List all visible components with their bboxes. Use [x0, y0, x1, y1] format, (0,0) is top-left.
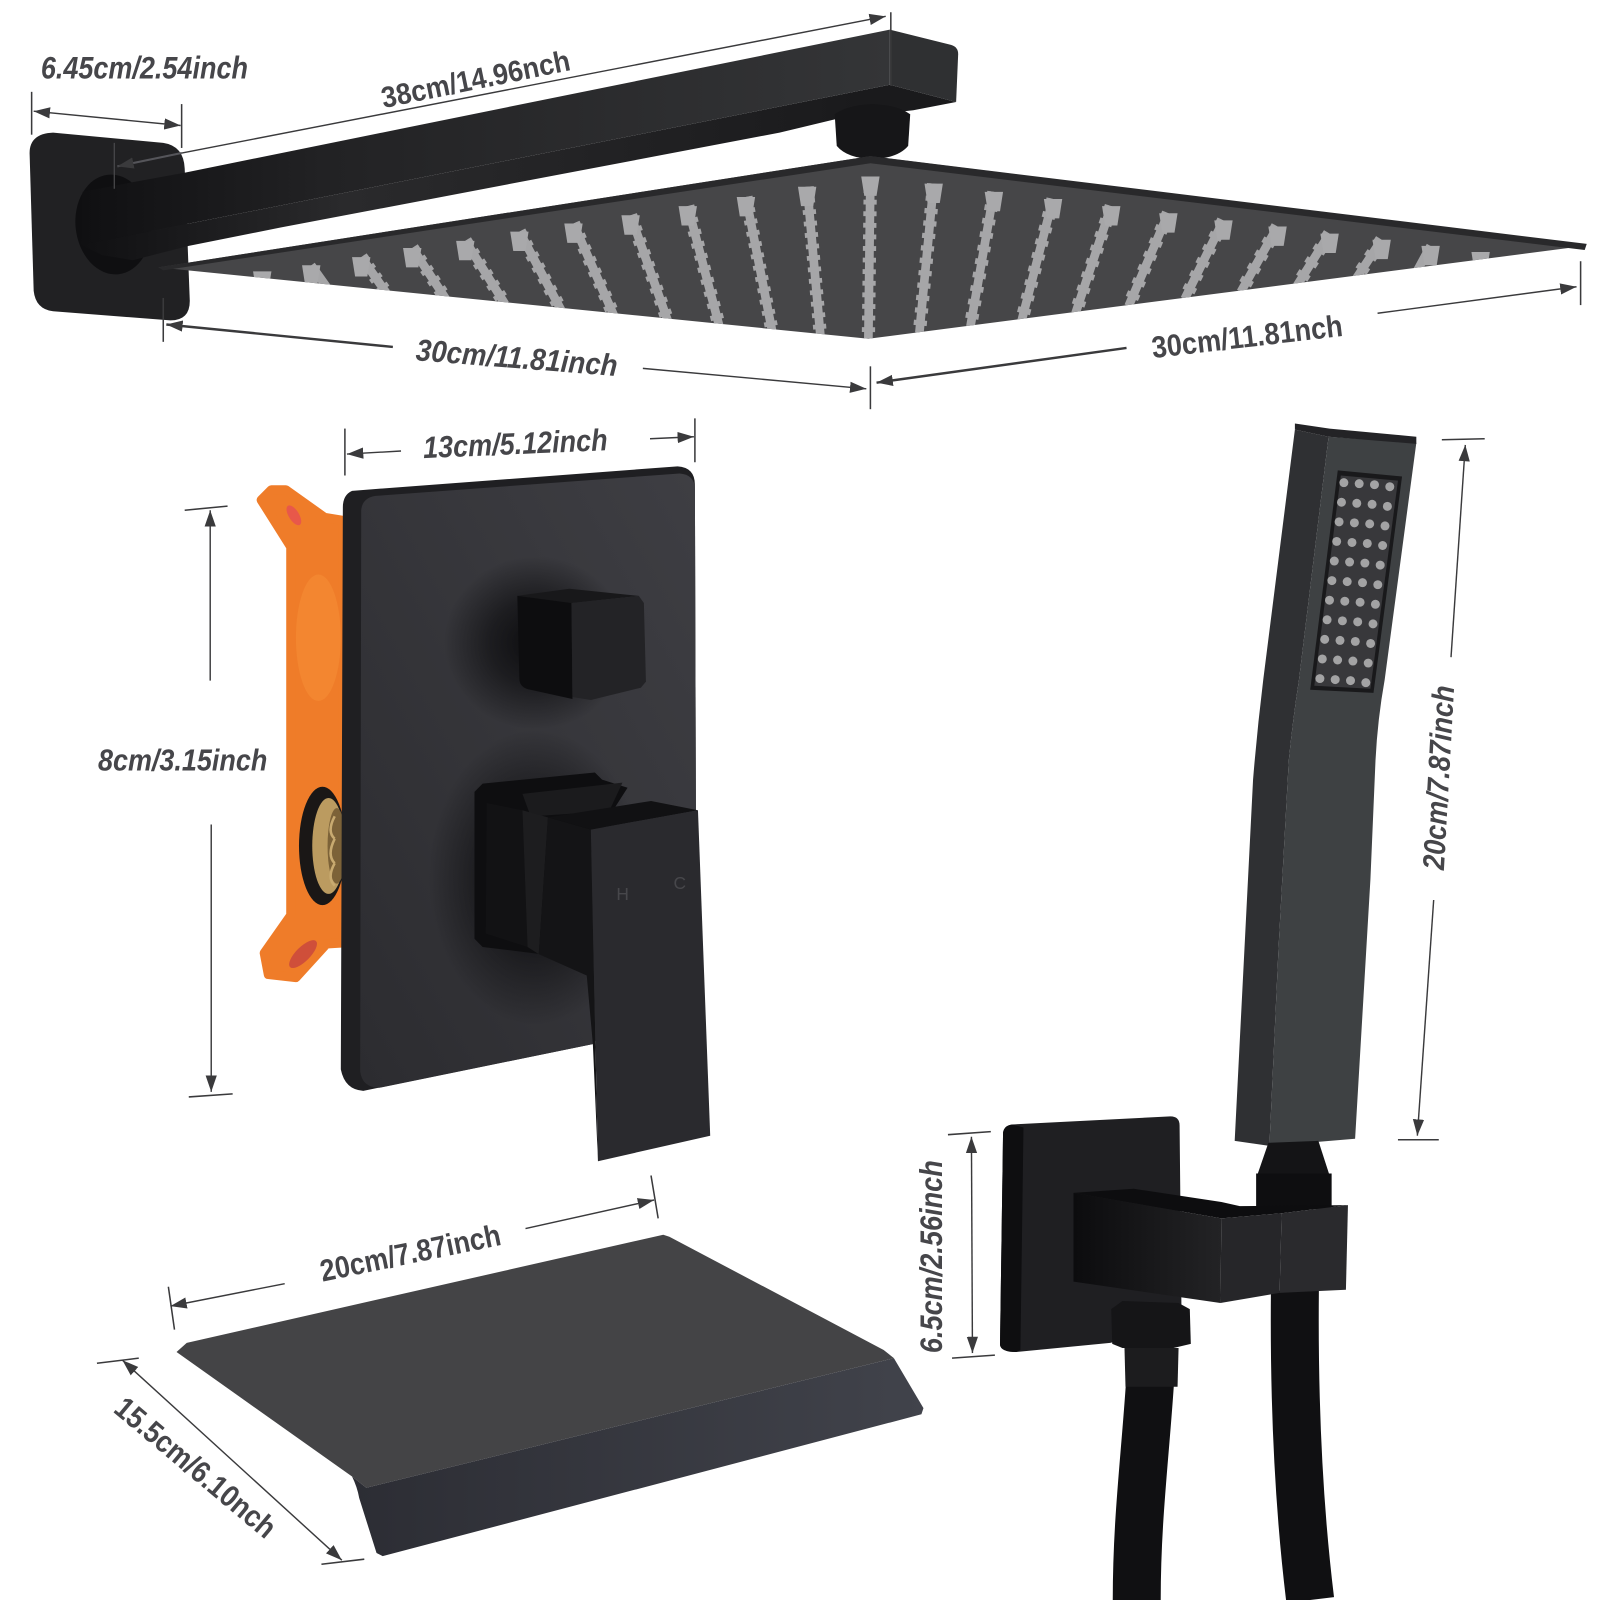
elbow end face: [1280, 1205, 1348, 1293]
elbow front face: [1220, 1213, 1282, 1303]
spray nozzles: [1315, 478, 1394, 687]
lower mounting hole: [285, 936, 321, 972]
mixer joint: [522, 810, 548, 954]
diverter knob: [517, 589, 646, 700]
dimension: hand shower length 20cm: [1398, 439, 1485, 1140]
dimension: valve plate width 13cm: 13cm/5.12inch: [422, 423, 608, 465]
dimension: arm flange 6.45cm: [32, 50, 248, 148]
spout front face: [352, 1358, 923, 1556]
product: rain shower head and wall arm: [30, 30, 1587, 339]
left hose: [1137, 1383, 1150, 1600]
upper mounting hole: [284, 503, 304, 528]
dimension: holder height 6.5cm: [913, 1132, 995, 1358]
lever front: [591, 810, 710, 1161]
plate front face: [360, 473, 696, 1088]
hot mark: H: [616, 884, 629, 904]
handset side face: [1235, 430, 1329, 1146]
product: shower hose holder and hoses: [1000, 1116, 1348, 1600]
head plate: [158, 156, 1585, 339]
product: waterfall tub spout: [177, 1235, 923, 1556]
mixer base: [474, 772, 628, 954]
elbow top: [1073, 1189, 1348, 1218]
handset front face: [1269, 437, 1416, 1146]
dimension: spout depth 15.5cm: [97, 1358, 364, 1564]
ferrule: [1124, 1348, 1179, 1387]
spout top face: [177, 1235, 894, 1488]
dimension: spout depth 15.5cm: 15.5cm/6.10nch: [108, 1391, 283, 1545]
spray face: [1310, 470, 1402, 693]
dimension: head width 30cm left: [163, 298, 870, 409]
dimension: holder height 6.5cm: 6.5cm/2.56inch: [913, 1160, 949, 1353]
product: mixer valve box and trim: [261, 466, 710, 1161]
arm end face: [890, 30, 958, 102]
plate bevel: [1000, 1124, 1023, 1352]
handset top edge: [1295, 423, 1416, 444]
orange rough-in box: [261, 490, 343, 978]
dimension: valve plate height 8cm: [98, 506, 267, 1097]
cold mark: C: [673, 873, 686, 893]
nozzle columns: [253, 177, 1490, 339]
knock-out circle: [296, 574, 341, 701]
collar: [1256, 1173, 1332, 1209]
hex nut: [1111, 1301, 1191, 1348]
dimension: spout width 20cm: [168, 1176, 658, 1330]
dimension: arm length 38cm: 38cm/14.96nch: [378, 44, 573, 115]
escutcheon: [70, 171, 156, 278]
dimension: valve plate height 8cm: 8cm/3.15inch: [98, 743, 267, 777]
valve trim plate: [341, 466, 696, 1091]
dimension: head width 30cm left: 30cm/11.81inch: [415, 333, 619, 383]
head rim: [158, 156, 1587, 270]
dimension: head width 30cm right: [877, 261, 1581, 383]
underside of arm: [82, 85, 956, 260]
elbow side: [1073, 1193, 1221, 1303]
cone neck: [1257, 1141, 1330, 1176]
dimension: spout width 20cm: 20cm/7.87inch: [317, 1218, 504, 1288]
product: hand shower: [1235, 423, 1416, 1146]
right hose: [1295, 1291, 1310, 1600]
dimension: hand shower length 20cm: 20cm/7.87inch: [1417, 684, 1461, 872]
swivel nut: [835, 104, 910, 159]
arm side face: [82, 30, 890, 245]
dimension: valve plate width 13cm: [345, 418, 695, 476]
dimension: head width 30cm right: 30cm/11.81nch: [1150, 309, 1344, 365]
inlet gasket: [299, 787, 346, 905]
brass inlet: [312, 798, 346, 894]
wall plate: [30, 133, 190, 320]
plate shadows: [447, 569, 590, 1000]
lever side: [539, 817, 598, 1161]
holder wall plate: [1000, 1116, 1182, 1352]
dimension: arm length 38cm: [114, 12, 891, 189]
dimension: arm flange 6.45cm: 6.45cm/2.54inch: [41, 50, 248, 86]
lever top: [548, 801, 698, 830]
